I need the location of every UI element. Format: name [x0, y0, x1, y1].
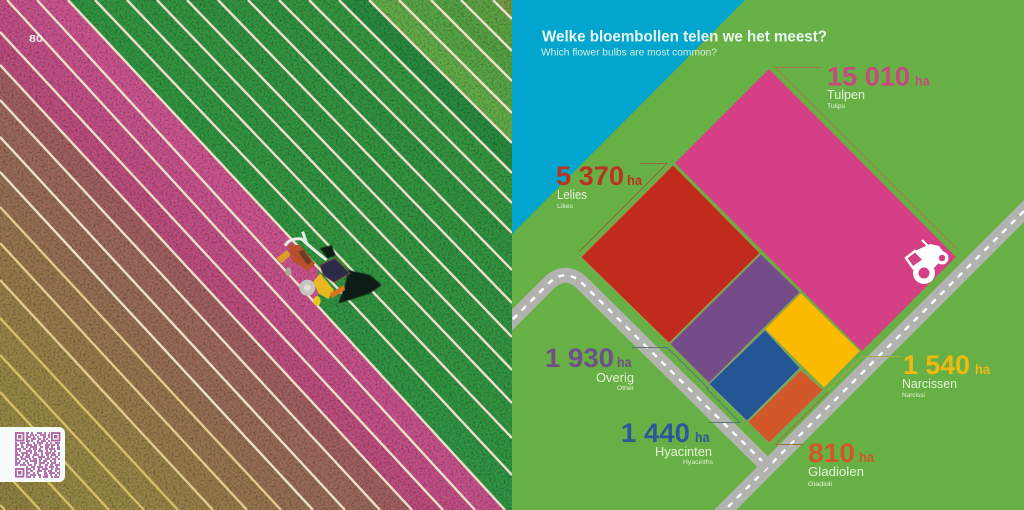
photo: aerial view of flower bulb field — [0, 0, 512, 510]
label: other: Other — [617, 385, 635, 392]
label: gladioli — [808, 438, 874, 488]
label: hyacinths — [621, 418, 714, 466]
label: daffodils — [902, 350, 990, 399]
label: tulips: 15 010 — [827, 62, 910, 92]
subtitle: Which flower bulbs are most common? — [541, 46, 717, 58]
label: lilies: 5 370 — [556, 161, 624, 191]
water: blue corner — [512, 0, 745, 234]
field: tulips — [675, 69, 956, 351]
page number: 80 — [29, 34, 44, 45]
panel: map of bulb fields — [504, 0, 1024, 510]
harvester machine in the field — [277, 232, 382, 306]
label: lilies: Lilies — [557, 203, 574, 210]
label: other: ha — [617, 354, 632, 370]
leader line: hyacinths — [706, 388, 740, 422]
field: gladioli — [748, 370, 823, 443]
label: lilies: Lelies — [557, 187, 587, 202]
label: gladioli: ha — [859, 449, 874, 465]
leader line: other — [632, 348, 709, 389]
label: lilies: ha — [627, 172, 642, 188]
field: hyacinths — [709, 330, 800, 421]
label: daffodils: ha — [975, 361, 990, 377]
label: tulips — [827, 62, 930, 110]
label: lilies — [556, 161, 642, 210]
label: hyacinths: 1 440 — [621, 418, 690, 448]
leader line: daffodils — [827, 356, 900, 391]
label: gladioli: Gladioli — [808, 481, 832, 488]
label: gladioli: 810 — [808, 438, 855, 468]
label: tulips: Tulips — [827, 103, 846, 110]
label: other: Overig — [596, 370, 634, 385]
label: hyacinths: Hyacinths — [683, 459, 714, 466]
leader line: tulips — [775, 68, 957, 249]
label: gladioli: Gladiolen — [808, 464, 864, 479]
road: left bend — [504, 275, 768, 467]
leader line: gladioli — [775, 392, 828, 444]
label: other: 1 930 — [545, 343, 614, 373]
label: hyacinths: Hyacinten — [655, 444, 712, 459]
field: lilies — [581, 165, 760, 343]
label: daffodils: Narcissi — [902, 392, 925, 399]
QR code card — [0, 427, 65, 482]
label: tulips: ha — [915, 72, 930, 88]
label: hyacinths: ha — [695, 429, 710, 445]
field: daffodils — [765, 293, 860, 388]
label: daffodils: Narcissen — [902, 376, 957, 391]
furrow lines — [0, 0, 512, 510]
road: right diagonal — [714, 200, 1024, 510]
title: Welke bloembollen telen we het meest? — [542, 28, 827, 46]
field: other — [670, 254, 800, 383]
label: other — [545, 343, 635, 392]
leader line: lilies — [579, 164, 667, 252]
label: tulips: Tulpen — [827, 87, 865, 102]
icon: tractor — [906, 240, 948, 284]
label: daffodils: 1 540 — [903, 350, 970, 380]
